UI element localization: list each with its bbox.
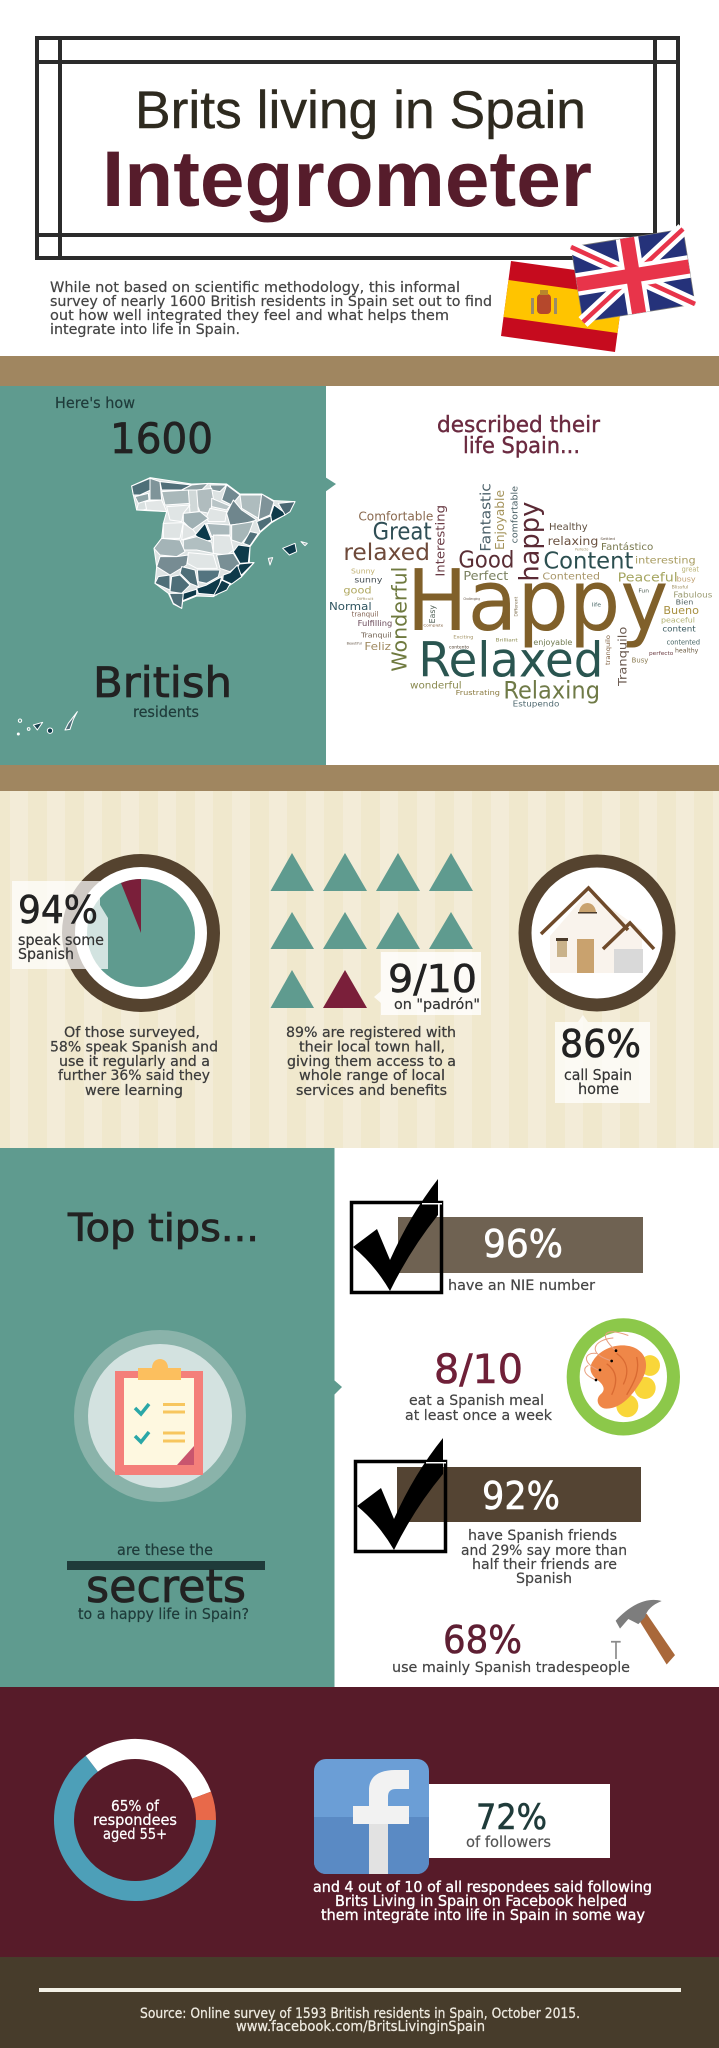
text: facebook paragraph: Brits Living in Spain on Facebook helped [335, 1892, 627, 1910]
word cloud: Comfortable [358, 510, 433, 524]
stat: 92% friends: have Spanish friends [468, 1528, 617, 1544]
intro text: out how well integrated they feel and what helps them [50, 308, 449, 324]
callout: 86% [555, 1015, 650, 1103]
word cloud: happy [514, 502, 545, 582]
stat: 96% NIE: have an NIE number [448, 1278, 595, 1294]
text: residents: residents [133, 703, 199, 721]
callout: 86%: call Spain [564, 1066, 632, 1084]
word cloud: Tranquilo [616, 627, 630, 687]
word cloud: Great [373, 517, 432, 545]
stat: 68% tradespeople [392, 1618, 630, 1676]
word cloud: Complete [423, 624, 444, 628]
word cloud: perfecto [649, 651, 673, 657]
panel: word cloud [329, 413, 712, 709]
stat: 8/10: 8/10 [434, 1347, 523, 1393]
word cloud: Enjoyable [493, 490, 507, 550]
panel: title header [35, 36, 695, 352]
callout: 9/10: on "padrón" [394, 997, 480, 1013]
word cloud: peaceful [661, 616, 695, 625]
intro text: integrate into life in Spain. [50, 322, 240, 338]
word cloud: sunny [354, 576, 383, 585]
word cloud: enjoyable [533, 638, 572, 647]
heading: Top tips: Top tips... [67, 1206, 259, 1250]
stat: 68% tradespeople: use mainly Spanish tradespeople [392, 1660, 630, 1676]
word cloud: wonderful [410, 680, 462, 691]
word cloud: good [343, 585, 372, 596]
word cloud: Exciting [453, 634, 474, 639]
text: 65% of respondees [93, 1797, 177, 1843]
text: source: Source: Online survey of 1593 British residents in Spain, October 2015. [140, 2006, 580, 2022]
text: source: www.facebook.com/BritsLivinginSpain [236, 2019, 485, 2035]
callout: 9/10 [374, 952, 481, 1015]
word cloud: Good [458, 548, 514, 574]
word cloud: Settled [600, 537, 615, 541]
word cloud: great [682, 566, 699, 574]
stat: 92% friends: and 29% say more than [461, 1543, 627, 1559]
text: facebook paragraph [313, 1878, 652, 1924]
stat: 8/10 [405, 1347, 553, 1424]
word cloud: Fantástico [601, 542, 654, 553]
word cloud: Contented [542, 571, 600, 582]
word cloud: tranquilo [605, 635, 612, 665]
stat: 8/10: at least once a week [405, 1408, 553, 1424]
word cloud: Peaceful [618, 570, 678, 585]
icon: house in ring [525, 861, 669, 1005]
word cloud: contento [449, 644, 470, 649]
text: padron paragraph: services and benefits [296, 1083, 447, 1099]
word cloud: Feliz [364, 640, 391, 653]
text: language paragraph: further 36% said they [58, 1068, 210, 1084]
donut chart: 65% aged 55+ [64, 1749, 206, 1891]
callout: 94% [12, 881, 108, 969]
stat: 96% NIE: 96% [483, 1222, 563, 1266]
text: are these the: are these the [117, 1541, 213, 1559]
text: language paragraph: 58% speak Spanish and [50, 1040, 218, 1056]
word cloud: Fulfilling [358, 619, 392, 628]
stat: 92% friends [356, 1438, 641, 1587]
callout: 86%: 86% [560, 1022, 641, 1066]
icon: clipboard [74, 1330, 246, 1502]
text: 65% of respondees: aged 55+ [103, 1825, 167, 1843]
word cloud: Content [543, 546, 633, 574]
text: Here's how: Here's how [55, 394, 135, 412]
word cloud: Tranquil [360, 630, 392, 639]
word cloud: contented [667, 638, 700, 646]
panel: top tips right [352, 1179, 680, 1676]
word cloud: Beautiful [347, 641, 362, 645]
word cloud: Perfecto [575, 548, 588, 552]
callout: 86%: home [578, 1080, 619, 1098]
word cloud: Easy [428, 605, 437, 623]
stat: 68% tradespeople: 68% [443, 1618, 522, 1662]
word cloud: Wonderful [388, 567, 412, 672]
stat: 92% friends: 92% [482, 1474, 560, 1518]
text: 65% of respondees: respondees [93, 1811, 177, 1829]
stat: 8/10: eat a Spanish meal [409, 1393, 544, 1409]
word cloud: Perfect [463, 569, 509, 583]
word cloud: Relaxed [418, 633, 603, 689]
heading: described their life Spain: life Spain... [463, 434, 580, 459]
word cloud: Bien [676, 599, 693, 607]
word cloud: content [662, 625, 696, 634]
title line 2: Integrometer [102, 134, 592, 223]
word cloud: busy [677, 575, 696, 584]
word cloud: Difficult [357, 597, 374, 601]
text: facebook paragraph: and 4 out of 10 of all respondees said following [313, 1878, 652, 1896]
title frame [35, 36, 680, 260]
callout: 94%: 94% [18, 888, 98, 932]
intro text: survey of nearly 1600 British residents in Spain set out to find [50, 294, 492, 310]
icon: Spanish flag [501, 261, 625, 352]
text: padron paragraph [286, 1025, 456, 1099]
text: 65% of respondees: 65% of [111, 1797, 160, 1815]
divider band: tan [0, 356, 719, 386]
word cloud: Sunny [351, 567, 375, 575]
word cloud: Fantastic [479, 483, 495, 552]
word cloud: relaxed [343, 538, 430, 566]
bar: rule [67, 1561, 265, 1570]
word cloud [329, 483, 712, 709]
text: padron paragraph: their local town hall, [299, 1040, 445, 1056]
panel: demographics and facebook [0, 1687, 719, 1957]
word cloud: Happy [407, 551, 668, 650]
number: 1600: 1600 [110, 414, 213, 463]
text: to a happy life: to a happy life in Spain? [78, 1605, 249, 1623]
callout: 94%: Spanish [18, 945, 74, 963]
callout: 72% of followers: of followers [466, 1833, 551, 1851]
word cloud: comfortable [511, 486, 521, 543]
word cloud: Different [514, 596, 519, 617]
word cloud: Normal [329, 600, 372, 613]
callout: 72% of followers: 72% [476, 1798, 547, 1838]
icon: facebook [314, 1759, 429, 1874]
panel: top tips left [0, 1148, 334, 1687]
intro text: While not based on scientific methodology, this informal [50, 280, 460, 296]
text: source [140, 2006, 580, 2035]
pictogram: 9 of 10 triangles [270, 853, 473, 1008]
icon: hammer and nail [611, 1600, 675, 1664]
word cloud: Interesting [433, 505, 447, 577]
stat: 92% friends: half their friends are [472, 1557, 617, 1573]
word cloud: Fun [638, 589, 649, 595]
word cloud: Frustrating [456, 688, 500, 697]
word cloud: tranquil [352, 611, 378, 619]
word cloud: Healthy [549, 522, 588, 533]
panel: stats on cream [0, 791, 719, 1148]
pie chart: speak some Spanish [68, 860, 214, 1006]
text: facebook paragraph: them integrate into life in Spain in some way [321, 1906, 645, 1924]
word cloud: Brilliant [496, 638, 518, 644]
arrow: panel pointer [325, 477, 336, 492]
stat: 92% friends: Spanish [516, 1571, 572, 1587]
word cloud: interesting [635, 555, 696, 566]
intro text [50, 280, 492, 338]
arrow: tips pointer [334, 1380, 342, 1395]
divider band: tan 2 [0, 765, 719, 791]
word cloud: Blissful [672, 584, 688, 589]
heading: described their life Spain: described their [437, 413, 601, 438]
word cloud: Challenging [463, 597, 480, 601]
text: language paragraph: were learning [85, 1083, 183, 1099]
map of Spain [17, 478, 307, 735]
text: padron paragraph: whole range of local [299, 1068, 445, 1084]
panel: footer [0, 1957, 719, 2048]
word cloud: Bueno [663, 604, 699, 617]
text: language paragraph [50, 1025, 218, 1099]
word cloud: Busy [632, 656, 648, 664]
callout: 94%: speak some [18, 931, 104, 949]
text: padron paragraph: giving them access to a [287, 1054, 456, 1070]
panel: 1600 British residents [0, 386, 326, 765]
icon: plate of prawns [567, 1318, 680, 1436]
text: language paragraph: Of those surveyed, [64, 1025, 200, 1041]
callout: 9/10: 9/10 [388, 957, 477, 1001]
heading: described their life Spain [437, 413, 601, 459]
word cloud: Fabulous [673, 591, 712, 600]
word cloud: healthy [675, 647, 699, 654]
title line 1: Brits living in Spain [135, 81, 586, 140]
icon: UK flag [571, 229, 695, 322]
text: language paragraph: use it regularly and a [59, 1054, 210, 1070]
word cloud: Estupendo [513, 700, 559, 709]
callout: 72% of followers [429, 1784, 610, 1858]
heading: secrets: secrets [86, 1560, 246, 1613]
heading: British: British [93, 658, 232, 707]
stat: 96% NIE [352, 1179, 643, 1294]
word cloud: relaxing [548, 534, 598, 548]
word cloud: Relaxing [503, 676, 600, 704]
word cloud: life [592, 603, 601, 609]
text: padron paragraph: 89% are registered with [286, 1025, 456, 1041]
